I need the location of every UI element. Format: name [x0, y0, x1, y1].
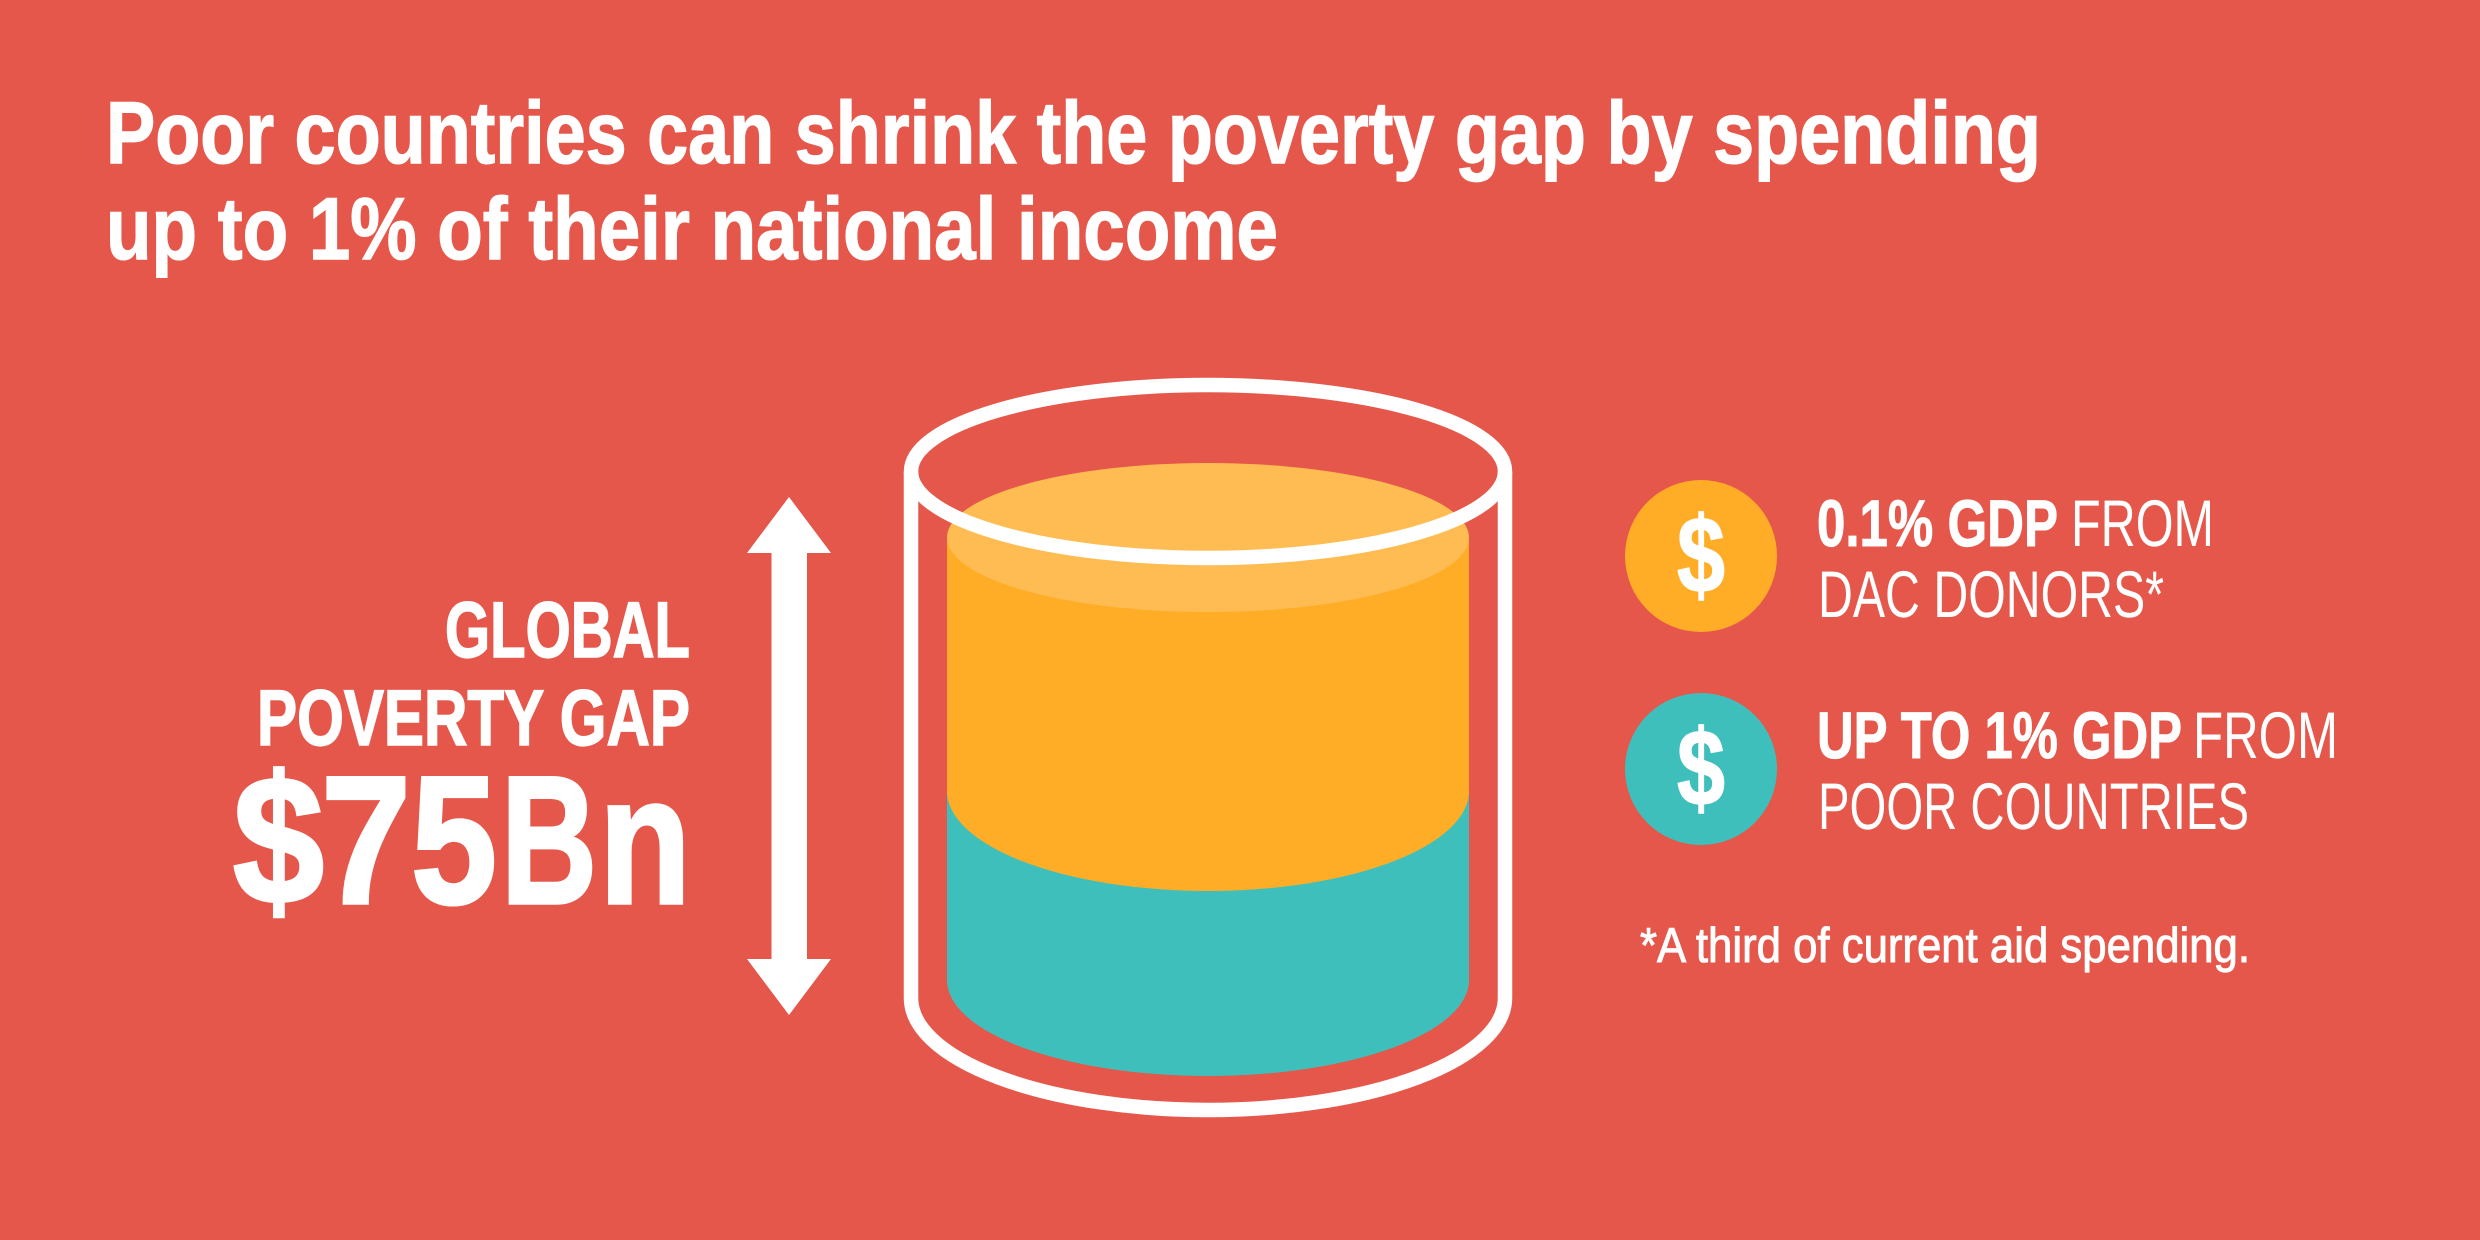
icon: orange dollar coin: $	[1677, 494, 1725, 615]
icon: teal dollar coin	[1625, 693, 1777, 845]
value: $75Bn: $	[233, 738, 324, 942]
label: global poverty gap: POVERTY GAP	[257, 673, 690, 762]
value: $75Bn	[233, 738, 691, 942]
legend text: DAC donors: DAC DONORS*	[1818, 557, 2164, 631]
legend item: DAC donors	[1625, 480, 2214, 632]
orange layer: DAC donors	[947, 538, 1469, 891]
label: global poverty gap: GLOBAL	[445, 585, 690, 674]
legend text: DAC donors: FROM	[2071, 486, 2214, 560]
icon: double-headed arrow	[747, 497, 831, 1015]
title: up to 1% of their national income	[106, 179, 1278, 278]
legend item: poor countries	[1625, 693, 2338, 845]
legend text: DAC donors	[1817, 486, 2214, 631]
value: $75Bn: B	[501, 738, 597, 942]
legend text: DAC donors: 0.1% GDP	[1817, 486, 2058, 560]
value: $75Bn: 5	[411, 738, 497, 942]
legend text: poor countries	[1817, 698, 2338, 843]
label: global poverty gap	[233, 585, 691, 942]
liquid surface	[947, 463, 1469, 612]
icon: orange dollar coin	[1625, 480, 1777, 632]
title: Poor countries can shrink the poverty gap by spending	[106, 83, 2041, 182]
teal layer: poor countries	[947, 700, 1469, 1076]
cylinder chart	[911, 385, 1505, 1110]
icon: teal dollar coin: $	[1677, 707, 1725, 828]
legend text: poor countries: FROM	[2193, 698, 2338, 772]
legend text: poor countries: POOR COUNTRIES	[1818, 769, 2249, 843]
value: $75Bn: n	[599, 738, 691, 942]
footnote: *A third of current aid spending.	[1640, 919, 2250, 973]
value: $75Bn: 7	[321, 738, 411, 942]
glass outline	[911, 385, 1505, 1110]
title	[106, 83, 2041, 278]
legend text: poor countries: UP TO 1% GDP	[1817, 698, 2182, 772]
